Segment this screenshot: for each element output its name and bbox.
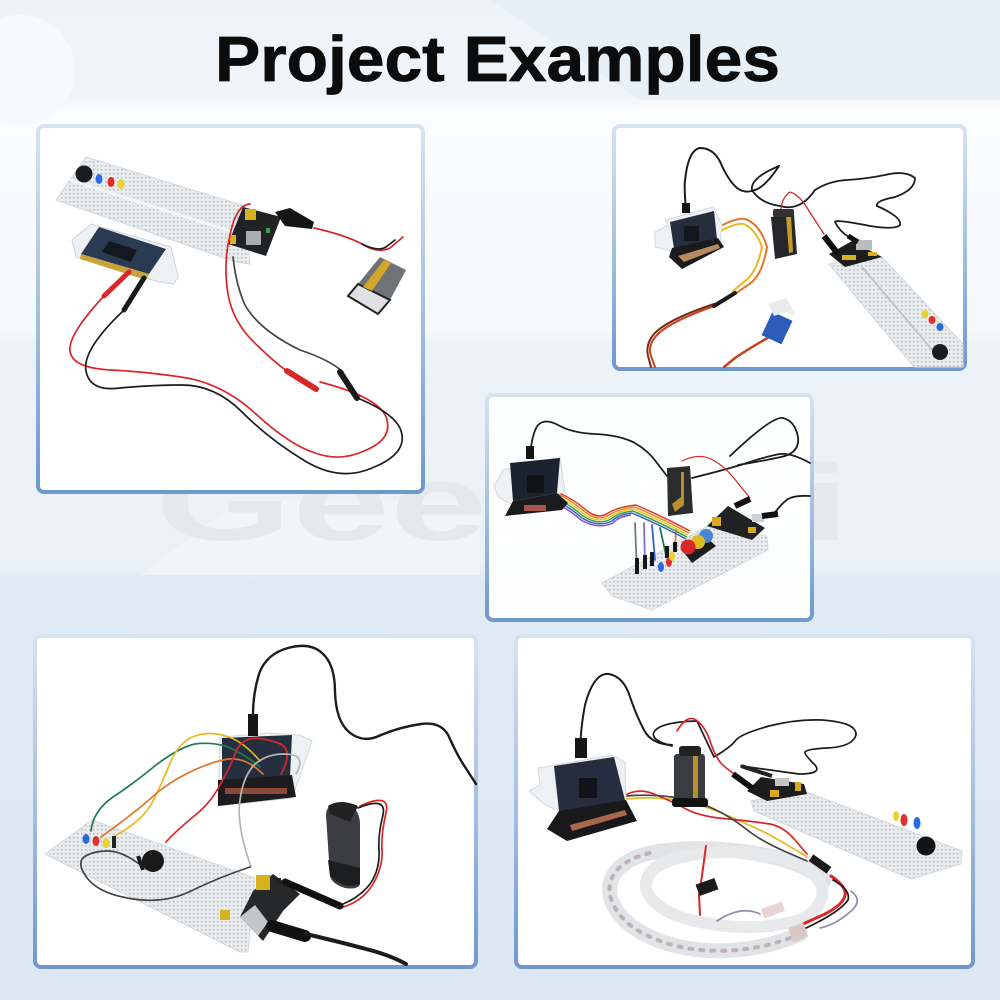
power module <box>707 499 778 540</box>
panel: project example 4 <box>35 636 476 967</box>
micro:bit <box>529 738 637 841</box>
breadboard <box>56 157 250 264</box>
LEDs <box>658 551 675 572</box>
power module <box>228 207 314 256</box>
breadboard <box>751 791 962 879</box>
micro:bit <box>72 224 178 284</box>
title: Project Examples <box>215 23 780 95</box>
USB cable <box>253 646 476 784</box>
micro:bit <box>494 446 568 516</box>
9V battery <box>771 209 797 259</box>
panel: project example 2 <box>614 126 965 369</box>
battery <box>326 802 360 888</box>
micro:bit <box>218 714 312 806</box>
power module <box>733 766 807 801</box>
wires <box>70 204 403 474</box>
panel: project example 1 <box>38 126 423 492</box>
buzzer and LEDs <box>893 811 936 856</box>
LED strip <box>610 849 824 951</box>
rainbow ribbon cable <box>552 492 690 539</box>
panel: project example 5 <box>516 636 973 967</box>
wires <box>647 148 915 367</box>
power module <box>824 236 882 267</box>
jumper wires <box>81 734 387 907</box>
panel: project example 3 <box>487 395 812 620</box>
alligator clips <box>104 272 357 398</box>
LEDs <box>82 834 116 848</box>
9V battery <box>348 257 406 314</box>
power module <box>220 874 340 941</box>
wires <box>580 674 857 928</box>
USB power cable <box>306 934 406 964</box>
watermark logo: GeeekPi <box>155 442 850 563</box>
wires <box>530 418 810 573</box>
battery <box>672 746 708 807</box>
buzzer and LEDs <box>76 166 124 189</box>
buzzer module <box>680 529 716 563</box>
buzzer <box>138 850 164 872</box>
9V battery <box>667 466 693 516</box>
servo <box>762 298 796 344</box>
micro:bit <box>655 203 724 269</box>
jumper pins <box>635 542 677 574</box>
breadboard <box>829 257 963 367</box>
strip connectors <box>696 854 831 942</box>
breadboard <box>45 820 255 952</box>
breadboard <box>602 526 768 610</box>
buzzer and LEDs <box>922 310 948 360</box>
